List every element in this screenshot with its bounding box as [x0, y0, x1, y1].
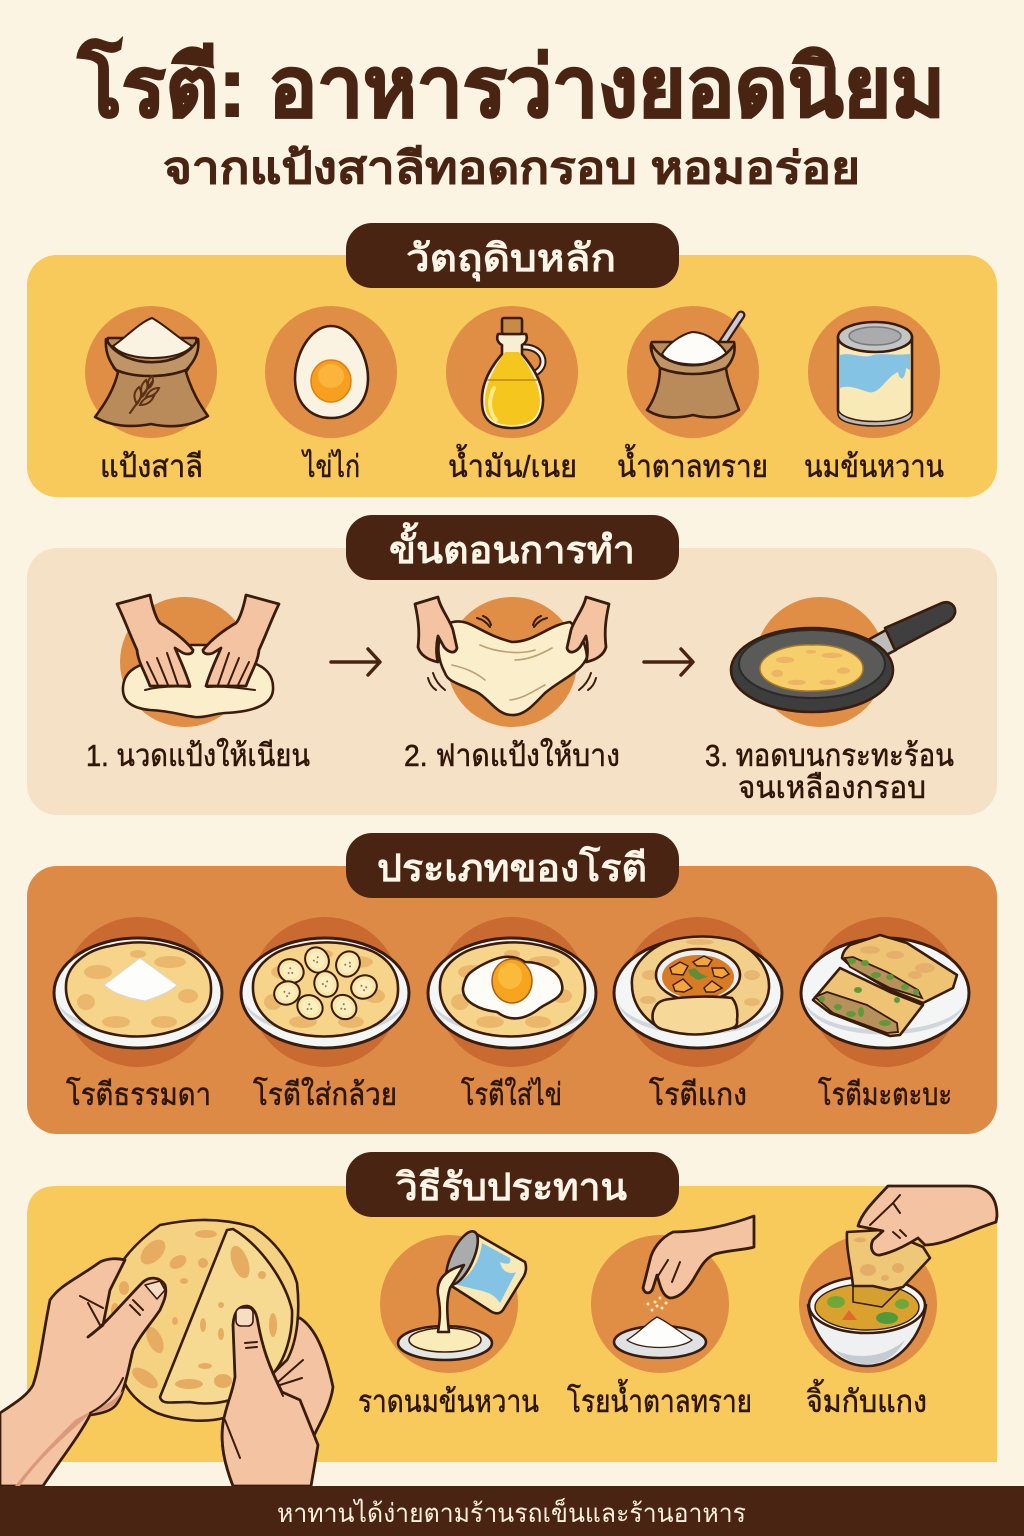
title: โรตี: อาหารว่างยอดนิยม	[77, 39, 945, 134]
illustration: pouring condensed milk	[380, 1227, 526, 1373]
label: condensed milk: นมข้นหวาน	[804, 449, 944, 484]
label: sugar: น้ำตาลทราย	[617, 444, 768, 484]
illustration: dipping in curry	[799, 1186, 997, 1373]
illustration: hands holding roti	[0, 1220, 333, 1486]
heading pill: types	[346, 833, 679, 898]
icon: egg	[265, 306, 397, 438]
heading pill: ingredients: วัตถุดิบหลัก	[406, 238, 616, 282]
panel: how to eat	[27, 1186, 997, 1462]
label: banana roti: โรตีใส่กล้วย	[253, 1077, 397, 1112]
heading pill: types: ประเภทของโรตี	[377, 845, 647, 890]
roti plain with sugar	[54, 917, 222, 1067]
left hand shadow	[15, 1390, 123, 1486]
footer banner: หาทานได้ง่ายตามร้านรถเข็นและร้านอาหาร	[277, 1497, 746, 1528]
heading pill: how to eat	[346, 1152, 679, 1217]
icon: wheat	[130, 376, 159, 413]
label: step 2: 2. ฟาดแป้งให้บาง	[404, 738, 620, 773]
label: sprinkle sugar: โรยน้ำตาลทราย	[567, 1379, 752, 1419]
footer banner	[0, 1486, 1024, 1536]
roti curry	[614, 917, 782, 1067]
label: flour: แป้งสาลี	[100, 449, 203, 484]
roti with banana	[241, 917, 409, 1067]
illustration: sprinkling sugar	[591, 1216, 754, 1373]
illustration: kneading dough	[117, 595, 279, 727]
label: plain roti: โรตีธรรมดา	[66, 1077, 211, 1112]
label: dip in curry: จิ้มกับแกง	[806, 1379, 927, 1419]
label: mataba: โรตีมะตะบะ	[818, 1077, 952, 1112]
illustration: frying pan	[731, 597, 955, 727]
icon: condensed milk can	[808, 306, 940, 438]
roti with egg	[428, 917, 596, 1067]
label: curry roti: โรตีแกง	[649, 1077, 747, 1112]
right hand back	[222, 1318, 333, 1486]
roti fold	[160, 1229, 292, 1403]
roti spots	[111, 1230, 217, 1392]
label: step 3 line 2: จนเหลืองกรอบ	[738, 770, 926, 805]
icon: sugar sack with spoon	[627, 306, 759, 438]
roti	[103, 1220, 298, 1421]
left thumbnail	[145, 1281, 165, 1299]
icon: flour sack	[85, 306, 217, 438]
arrow 1	[331, 649, 380, 675]
label: oil: น้ำมัน/เนย	[448, 444, 577, 484]
panel: steps	[27, 548, 997, 815]
panel: roti types	[27, 866, 997, 1134]
left hand	[0, 1259, 166, 1486]
icon: oil bottle	[446, 306, 578, 438]
heading pill: how to eat: วิธีรับประทาน	[395, 1167, 627, 1209]
label: step 1: 1. นวดแป้งให้เนียน	[86, 738, 310, 773]
illustration: stretching dough	[415, 597, 609, 727]
label: egg roti: โรตีใส่ไข่	[461, 1077, 562, 1112]
label: step 3 line 1: 3. ทอดบนกระทะร้อน	[705, 738, 954, 773]
heading pill: ingredients	[346, 223, 679, 288]
roti mataba	[801, 917, 969, 1067]
arrow 2	[644, 649, 693, 675]
heading pill: steps	[346, 515, 679, 580]
subtitle: จากแป้งสาลีทอดกรอบ หอมอร่อย	[163, 144, 860, 193]
label: egg: ไข่ไก่	[301, 449, 360, 484]
right thumbnail	[236, 1308, 253, 1326]
panel: ingredients	[27, 255, 997, 497]
label: pour milk: ราดนมข้นหวาน	[358, 1384, 539, 1419]
right thumb	[222, 1306, 318, 1486]
heading pill: steps: ขั้นตอนการทำ	[389, 522, 635, 572]
